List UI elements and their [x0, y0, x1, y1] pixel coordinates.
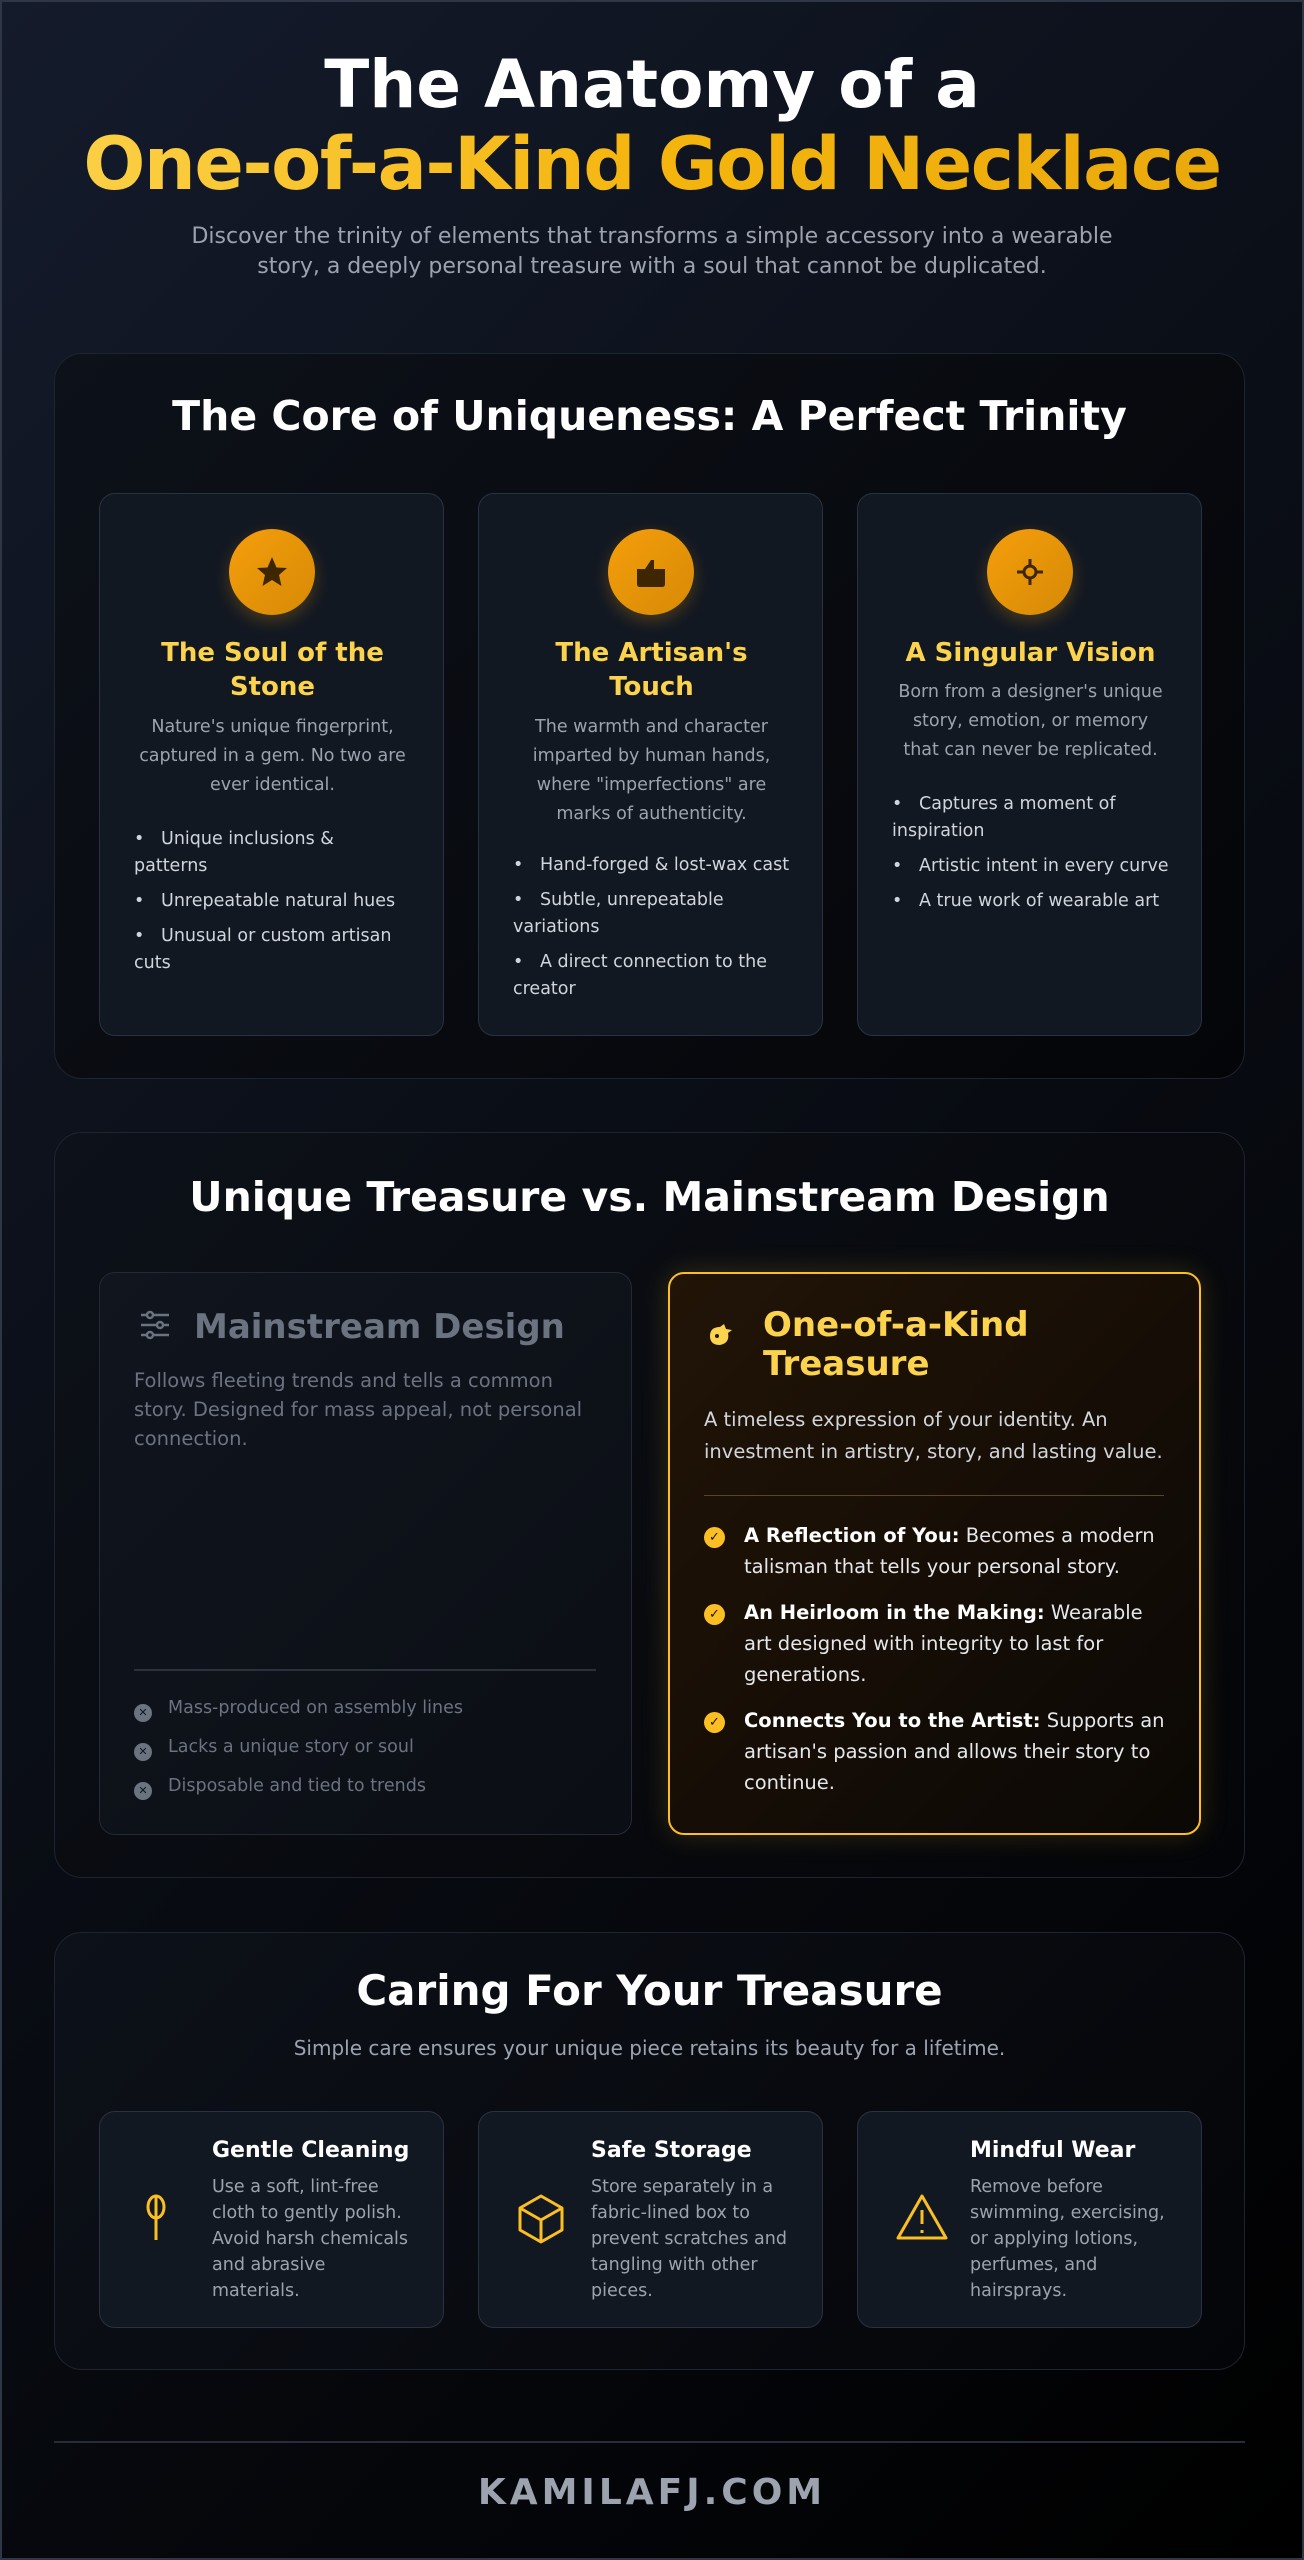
card: gentle cleaning [99, 2111, 444, 2328]
card: one-of-a-kind: A timeless expression of your identity. An investment in artistry, story, and lasting value. [704, 1408, 1163, 1463]
list: benefits: ✓ [709, 1530, 720, 1545]
subtitle: Discover the trinity of elements that transforms a simple accessory into a wearable story, a deeply personal treasure with a soul that cannot be duplicated. [191, 224, 1113, 279]
card: artisan's touch: • Subtle, unrepeatable variations [513, 890, 724, 937]
card: mainstream: Follows fleeting trends and tells a common story. Designed for mass appeal, not personal connection. [134, 1369, 582, 1450]
title: One-of-a-Kind Gold Necklace [83, 122, 1221, 207]
list: mainstream drawbacks: ✕ [138, 1745, 148, 1758]
list: benefits: ✓ [709, 1607, 720, 1622]
list: benefits: ✓ [709, 1715, 720, 1730]
icon: warning [896, 2194, 948, 2240]
card: artisan's touch: The Artisan's Touch [555, 638, 748, 702]
card: singular vision: • A true work of wearable art [892, 891, 1159, 911]
list: benefits [704, 1524, 1164, 1794]
card: gentle cleaning: Use a soft, lint-free cloth to gently polish. Avoid harsh chemicals and abrasive materials. [212, 2177, 408, 2301]
card: one-of-a-kind [668, 1272, 1201, 1835]
title: The Anatomy of a [324, 46, 980, 123]
icon: brush [146, 2194, 166, 2240]
icon: gem [710, 1324, 732, 1345]
list: mainstream drawbacks: Disposable and tied to trends [168, 1776, 426, 1796]
list: mainstream drawbacks: ✕ [138, 1784, 148, 1797]
card: safe storage [478, 2111, 823, 2328]
icon: compass [987, 529, 1073, 615]
footer: brand: KAMILAFJ.COM [478, 2472, 826, 2513]
card: singular vision [857, 493, 1202, 1036]
card: artisan's touch [478, 493, 823, 1036]
panel: comparison [54, 1132, 1245, 1878]
card: gentle cleaning: Gentle Cleaning [212, 2138, 409, 2163]
heading: one-of-a-kind: One-of-a-Kind [763, 1305, 1029, 1345]
heading: comparison: Unique Treasure vs. Mainstream Design [189, 1173, 1110, 1221]
card: mindful wear [857, 2111, 1202, 2328]
card: soul of the stone: • Unrepeatable natural hues [134, 891, 395, 911]
card: soul of the stone: Nature's unique fingerprint, captured in a gem. No two are ever identical. [139, 717, 406, 795]
heading: care: Caring For Your Treasure [356, 1966, 943, 2015]
icon: sliders [141, 1310, 169, 1340]
icon: hand [608, 529, 694, 615]
card: soul of the stone: • Unusual or custom artisan cuts [134, 926, 391, 973]
list: mainstream drawbacks: Lacks a unique story or soul [168, 1737, 414, 1757]
list: mainstream drawbacks: Mass-produced on assembly lines [168, 1698, 463, 1718]
icon: star [229, 529, 315, 615]
list: mainstream drawbacks [134, 1698, 463, 1800]
list: benefits: An Heirloom in the Making: Wearable art designed with integrity to last for generations. [744, 1601, 1143, 1686]
card: soul of the stone: • Unique inclusions & patterns [134, 829, 334, 876]
title [83, 46, 1221, 207]
heading: one-of-a-kind [763, 1305, 1029, 1384]
card: singular vision: A Singular Vision [905, 638, 1156, 668]
card: soul of the stone [99, 493, 444, 1036]
list: mainstream drawbacks: ✕ [138, 1706, 148, 1719]
heading: one-of-a-kind: Treasure [763, 1344, 930, 1384]
card: mindful wear: Mindful Wear [970, 2138, 1135, 2163]
heading: mainstream: Mainstream Design [194, 1307, 565, 1347]
card: singular vision: • Captures a moment of inspiration [892, 794, 1116, 841]
card: mainstream [99, 1272, 632, 1835]
card: soul of the stone: The Soul of the Stone [161, 638, 384, 702]
panel: trinity [54, 353, 1245, 1079]
card: safe storage: Store separately in a fabric-lined box to prevent scratches and tangling with other pieces. [591, 2177, 787, 2301]
card: safe storage: Safe Storage [591, 2138, 752, 2163]
card: singular vision: • Artistic intent in every curve [892, 856, 1169, 876]
list: benefits: Connects You to the Artist: Supports an artisan's passion and allows their story to continue. [744, 1709, 1164, 1794]
panel: care [54, 1932, 1245, 2370]
heading: trinity: The Core of Uniqueness: A Perfect Trinity [172, 392, 1127, 440]
card: artisan's touch: • A direct connection to the creator [513, 952, 767, 999]
card: mindful wear: Remove before swimming, exercising, or applying lotions, perfumes, and hairsprays. [970, 2177, 1165, 2301]
card: artisan's touch: • Hand-forged & lost-wax cast [513, 855, 789, 875]
card: artisan's touch: The warmth and character imparted by human hands, where "imperfections" are marks of authenticity. [533, 717, 770, 824]
icon: box [518, 2194, 564, 2244]
card: singular vision: Born from a designer's unique story, emotion, or memory that can never be replicated. [898, 682, 1163, 760]
subheading: care: Simple care ensures your unique piece retains its beauty for a lifetime. [294, 2036, 1005, 2060]
list: benefits: A Reflection of You: Becomes a modern talisman that tells your personal story. [744, 1524, 1155, 1578]
